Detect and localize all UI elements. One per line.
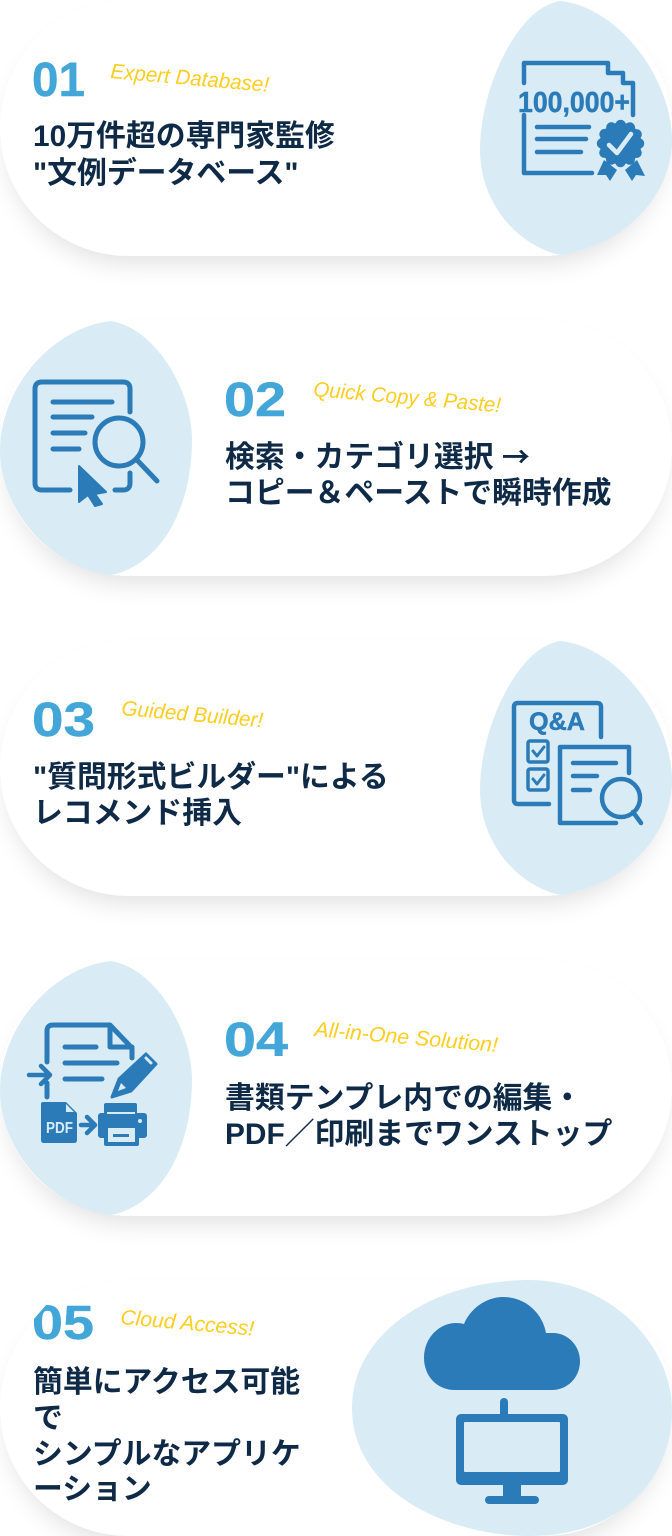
tagline 02: Quick Copy & Paste! <box>313 378 502 417</box>
icon: Q&A with search: Q&A <box>529 708 585 736</box>
number corner mask <box>28 1296 54 1320</box>
heading 05: で <box>33 1402 63 1435</box>
number 05: 05 <box>32 1297 94 1350</box>
tagline 05: Cloud Access! <box>120 1306 255 1341</box>
icon: document search with cursor <box>35 382 157 506</box>
icon: certificate document <box>518 63 645 181</box>
heading 01: 10万件超の専門家監修 <box>33 120 335 153</box>
icon: cloud and monitor <box>424 1297 580 1504</box>
heading 05: シンプルなアプリケ <box>33 1438 301 1471</box>
heading 03: レコメンド挿入 <box>33 797 242 830</box>
tagline 03: Guided Builder! <box>121 697 264 732</box>
panel: 05 cloud access <box>0 1280 672 1536</box>
icon: document edit, PDF and print <box>29 1025 156 1146</box>
panel: 03 guided builder <box>0 640 672 896</box>
icon: document edit, PDF and print: PDF <box>46 1120 73 1137</box>
heading 05: 簡単にアクセス可能 <box>33 1366 300 1399</box>
number 01: 01 <box>32 54 85 107</box>
heading 03: "質問形式ビルダー"による <box>33 761 389 794</box>
panel: 04 all-in-one solution <box>0 960 672 1216</box>
image blob 01 <box>480 1 672 255</box>
number 03: 03 <box>32 694 95 747</box>
image blob 03 <box>480 641 672 895</box>
image blob 04 <box>0 961 192 1215</box>
tagline 04: All-in-One Solution! <box>312 1018 499 1057</box>
panel: 02 quick copy and paste <box>0 320 672 576</box>
heading 01: "文例データベース" <box>33 156 299 190</box>
icon: Q&A with search <box>514 703 641 823</box>
heading 04: PDF／印刷までワンストップ <box>225 1118 613 1151</box>
number 04: 04 <box>224 1014 288 1067</box>
tagline 01: Expert Database! <box>110 60 270 97</box>
heading 05: ーション <box>33 1473 152 1506</box>
icon: certificate document: 100,000+ <box>518 87 630 119</box>
image blob 02 <box>0 321 192 575</box>
heading 02: コピー＆ペーストで瞬時作成 <box>225 477 611 510</box>
panel: 01 expert database <box>0 0 672 256</box>
heading 04: 書類テンプレ内での編集・ <box>225 1082 582 1115</box>
number 02: 02 <box>224 374 286 427</box>
heading 02: 検索・カテゴリ選択 → <box>225 436 530 476</box>
image blob 05 <box>352 1280 672 1536</box>
